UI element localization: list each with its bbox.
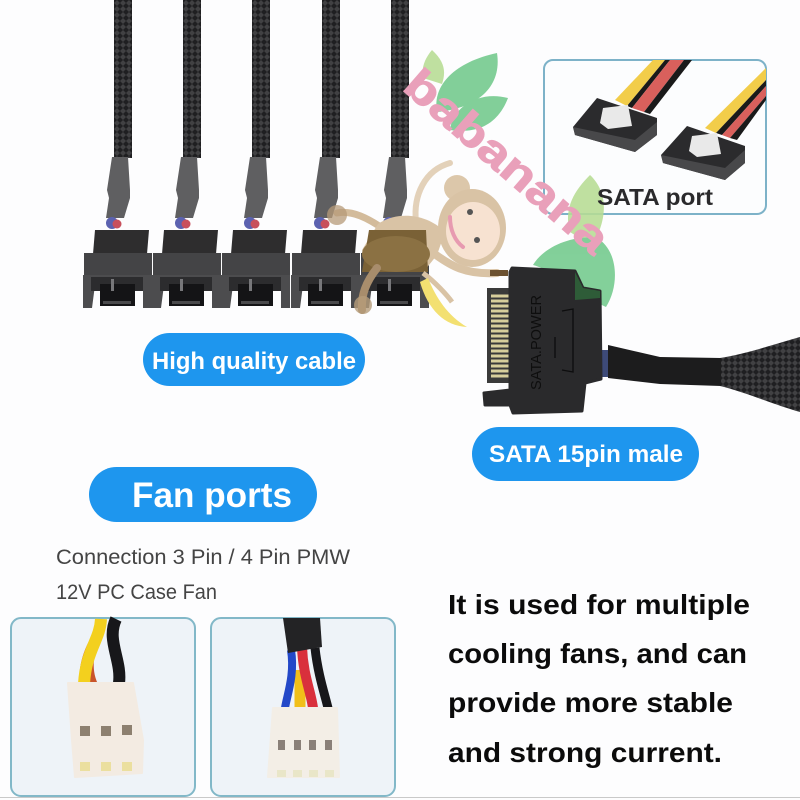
text: usage description: cooling fans, and can — [448, 638, 747, 669]
SATA cable left — [573, 60, 692, 152]
text: connection details: 12V PC Case Fan — [56, 581, 217, 604]
text: connection details — [56, 546, 350, 604]
text: usage description — [448, 589, 750, 768]
heat shrink tube — [608, 345, 721, 386]
SATA 15pin male power connector with cable — [484, 268, 800, 413]
SATA cable right — [661, 68, 766, 180]
wires — [80, 636, 99, 684]
plug body — [484, 268, 601, 413]
heading: Fan ports: Fan ports — [132, 476, 292, 515]
watermark: monkey — [327, 163, 508, 327]
heading: Fan ports — [89, 467, 317, 522]
watermark: leaves — [422, 50, 615, 307]
panel: SATA port — [544, 60, 766, 214]
gold contacts — [487, 288, 511, 383]
label: High quality cable: High quality cable — [152, 348, 356, 375]
text: usage description: It is used for multiple — [448, 589, 750, 620]
panel: 3 pin connector — [11, 618, 195, 796]
five fan cables with connectors — [83, 0, 429, 308]
heat shrink — [283, 618, 322, 653]
watermark: babanana: babanana — [394, 60, 620, 264]
braided cable — [720, 337, 800, 412]
SATA port label: SATA port — [597, 184, 713, 210]
panel: 4 pin connector — [211, 618, 395, 796]
housing — [68, 683, 143, 777]
label: SATA 15pin male — [472, 427, 699, 481]
wires — [294, 670, 306, 708]
label: SATA 15pin male: SATA 15pin male — [489, 441, 683, 468]
plug markings: SATA.POWER — [528, 295, 545, 390]
text: usage description: and strong current. — [448, 737, 722, 768]
housing — [268, 708, 339, 777]
text: connection details: Connection 3 Pin / 4 Pin PMW — [56, 546, 350, 569]
label: High quality cable — [143, 333, 365, 386]
text: usage description: provide more stable — [448, 687, 733, 718]
